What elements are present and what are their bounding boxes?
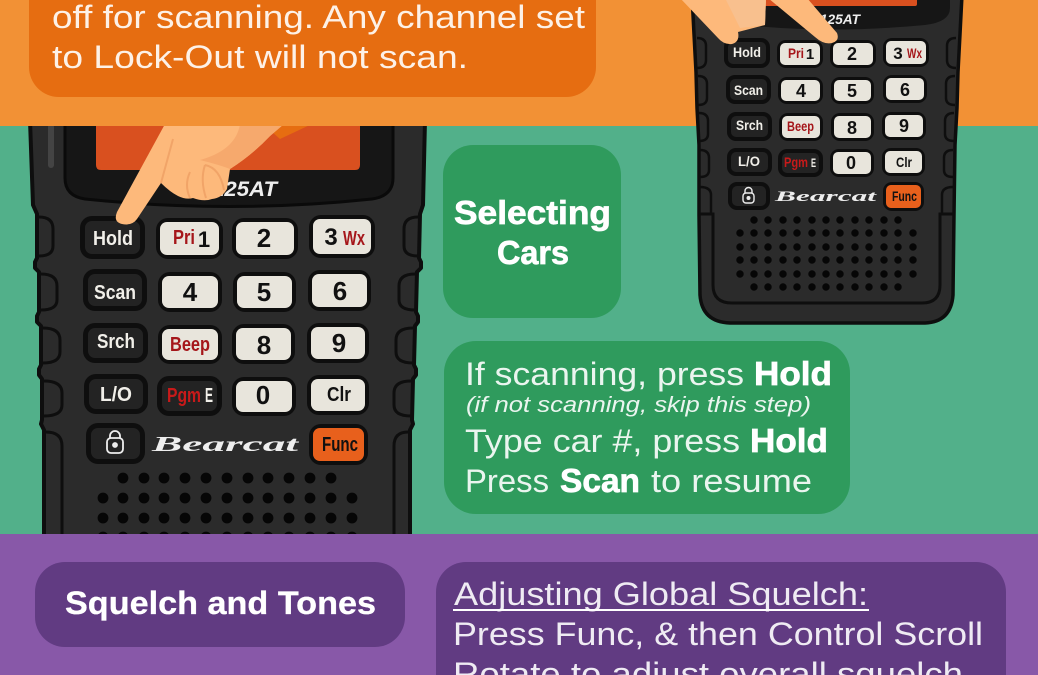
model number: BC125AT [180, 178, 279, 201]
key row: Hold Pri 1 2 3 Wx: 3 [893, 44, 903, 63]
icon: padlock [743, 188, 754, 203]
key row: L/O Pgm E 0 Clr: Clr [896, 154, 912, 170]
panel: selecting cars steps: to resume [651, 463, 812, 499]
icon: pointing hand [680, 0, 838, 44]
panel: selecting cars steps [444, 341, 850, 514]
panel: selecting cars steps: Type car #, press [465, 423, 740, 459]
screen bezel [65, 120, 393, 206]
key row: Scan 4 5 6: 6 [900, 80, 910, 100]
key row: lock, Bearcat logo, Func: Func [322, 434, 358, 456]
key row: L/O Pgm E 0 Clr: E [205, 385, 213, 407]
key row: Hold Pri 1 2 3 Wx: 2 [257, 223, 271, 253]
radio scanner: pressing Hold [30, 120, 425, 542]
key row: L/O Pgm E 0 Clr: 0 [846, 153, 856, 173]
key row: Hold Pri 1 2 3 Wx [80, 215, 375, 259]
panel: Squelch and Tones heading [35, 562, 405, 647]
panel: selecting cars steps: Hold [754, 355, 832, 392]
key row: lock, Bearcat logo, Func [86, 423, 368, 465]
key row: L/O Pgm E 0 Clr: 0 [256, 380, 270, 410]
key row: Scan 4 5 6: 4 [183, 277, 198, 307]
key row: L/O Pgm E 0 Clr: L/O [100, 384, 132, 406]
key row: Srch Beep 8 9: Srch [97, 331, 135, 353]
key row: L/O Pgm E 0 Clr: L/O [738, 153, 760, 169]
panel: lock-out note [29, 0, 596, 97]
green section background [0, 126, 1038, 534]
speaker grille [736, 216, 916, 290]
panel: adjusting global squelch [436, 562, 1006, 675]
key row: Scan 4 5 6: 6 [333, 276, 347, 306]
key row: Scan 4 5 6 [83, 269, 371, 312]
orange display [96, 126, 360, 170]
purple section [0, 534, 1038, 675]
key row: Hold Pri 1 2 3 Wx: Hold [733, 44, 761, 60]
key row: Hold Pri 1 2 3 Wx: Pri [788, 45, 804, 61]
key row: Scan 4 5 6: Scan [734, 82, 763, 98]
key row: Srch Beep 8 9 [727, 112, 926, 141]
key row: Scan 4 5 6 [726, 75, 927, 104]
key row: L/O Pgm E 0 Clr: Clr [327, 384, 351, 406]
orange display [740, 0, 917, 6]
key row: lock, Bearcat logo, Func: Bearcat [773, 189, 878, 205]
side grips [39, 217, 418, 540]
key row: Hold Pri 1 2 3 Wx: Pri [173, 227, 195, 249]
panel: Selecting Cars heading: Selecting [454, 194, 611, 231]
radio scanner: typing a number [680, 0, 962, 323]
key row: Scan 4 5 6: 4 [796, 81, 806, 101]
panel: selecting cars steps: (if not scanning, skip this step) [466, 392, 811, 417]
panel: adjusting global squelch: Press Func, & then Control Scroll [453, 616, 983, 652]
side grips [697, 38, 956, 214]
key row: lock, Bearcat logo, Func: Func [892, 188, 917, 204]
key row: Hold Pri 1 2 3 Wx [724, 38, 929, 68]
screen bezel [720, 0, 950, 30]
model number: BC125AT [800, 11, 861, 27]
panel: selecting cars steps: Scan [560, 462, 640, 499]
key row: L/O Pgm E 0 Clr: Pgm [167, 385, 201, 407]
key row: Hold Pri 1 2 3 Wx: 2 [847, 44, 857, 64]
key row: L/O Pgm E 0 Clr: Pgm [784, 154, 808, 170]
key row: L/O Pgm E 0 Clr: E [811, 156, 816, 170]
radio body [692, 0, 962, 323]
panel: Selecting Cars heading [443, 145, 621, 318]
key row: Srch Beep 8 9: 9 [899, 116, 909, 136]
key row: Srch Beep 8 9: Beep [170, 334, 210, 356]
panel: Squelch and Tones heading: Squelch and Tones [65, 585, 376, 621]
panel: selecting cars steps: If scanning, press [465, 356, 744, 392]
key row: Srch Beep 8 9: 8 [257, 330, 271, 360]
icon: pointing hand [116, 124, 312, 224]
panel: selecting cars steps: Press [465, 463, 549, 499]
key row: Scan 4 5 6: 5 [257, 277, 271, 307]
radio body [30, 120, 425, 540]
key row: Srch Beep 8 9: Srch [736, 117, 763, 133]
key row: lock, Bearcat logo, Func: Bearcat [150, 432, 301, 456]
panel: lock-out note: off for scanning. Any channel set [52, 0, 585, 35]
key row: Srch Beep 8 9: Beep [787, 118, 814, 134]
key row: Hold Pri 1 2 3 Wx: Wx [907, 45, 922, 61]
inner bumper line [700, 214, 953, 303]
key row: Hold Pri 1 2 3 Wx: Hold [93, 228, 133, 250]
icon: padlock [107, 431, 123, 453]
orange section [0, 0, 1038, 126]
panel: Selecting Cars heading: Cars [497, 234, 569, 271]
key row: L/O Pgm E 0 Clr [84, 374, 369, 416]
key row: Srch Beep 8 9: 8 [847, 118, 857, 138]
key row: Hold Pri 1 2 3 Wx: 1 [198, 227, 210, 252]
key row: Hold Pri 1 2 3 Wx: 3 [324, 224, 338, 251]
key row: Hold Pri 1 2 3 Wx: Wx [343, 228, 365, 250]
key row: Scan 4 5 6: 5 [847, 81, 857, 101]
panel: lock-out note: to Lock-Out will not scan. [52, 39, 468, 75]
key row: L/O Pgm E 0 Clr [727, 148, 925, 177]
key row: Srch Beep 8 9: 9 [332, 328, 346, 358]
key row: Scan 4 5 6: Scan [94, 282, 136, 304]
panel: adjusting global squelch: Adjusting Global Squelch: [454, 576, 868, 612]
speaker grille [98, 472, 358, 534]
key row: Hold Pri 1 2 3 Wx: 1 [806, 46, 814, 63]
key row: lock, Bearcat logo, Func [728, 182, 924, 211]
panel: selecting cars steps: Hold [750, 422, 828, 459]
key row: Srch Beep 8 9 [83, 323, 369, 364]
